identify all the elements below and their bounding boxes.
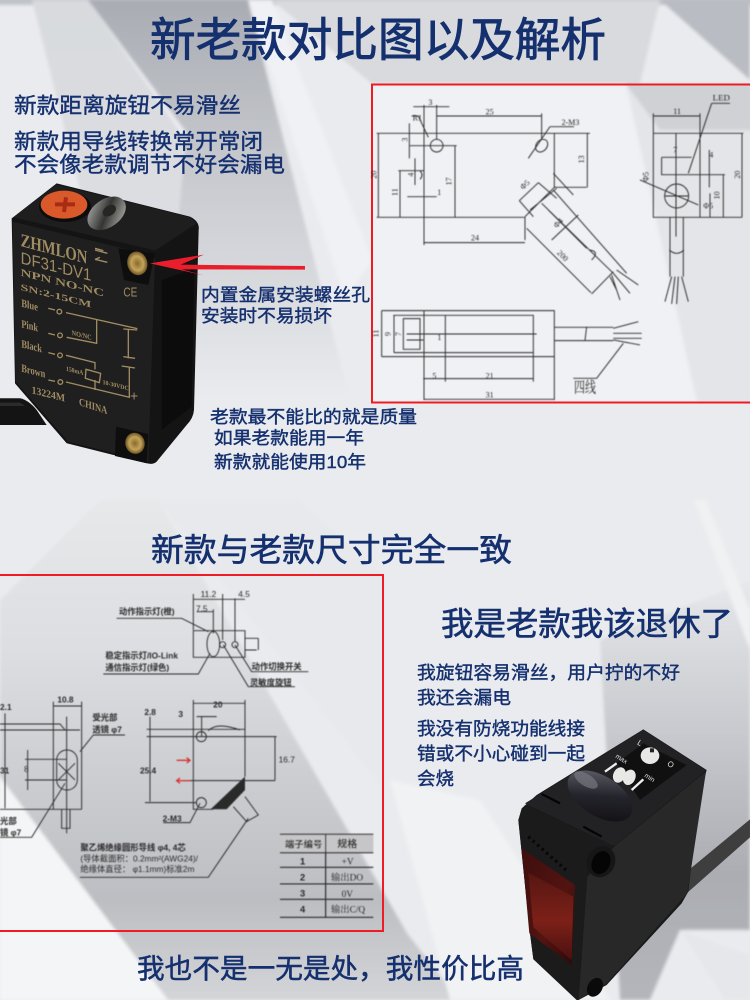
adjustment knobs: min [643,772,656,784]
printed label: 10-30VDC [103,379,129,393]
dimension labels: R1 [413,114,422,123]
terminal table: 4 [300,905,306,915]
text block: old model weaknesses: 会烧 [417,769,454,789]
brass mounting screws [123,249,150,456]
dimension labels: 稳定指示灯/IO-Link [105,651,178,661]
dimension labels: 4 [406,173,415,177]
lens [559,760,641,832]
dimension labels: 2.1 [0,702,12,712]
callout: metal mounting hole [201,285,370,326]
dimension labels: 9 [384,332,393,336]
sensor body [12,183,199,464]
printed label: Pink [21,318,38,335]
dimension labels: 16.7 [279,755,295,765]
printed label: 150mA [66,366,83,377]
old sensor product photo [518,729,750,1000]
dimension labels: Φ5 [703,201,713,210]
dimension labels: 1 [437,188,441,197]
clear lens [81,190,132,237]
dimension labels: 11.2 [201,589,217,599]
callout: quality comparison [210,407,417,472]
dimension labels: 11 [673,107,681,116]
dimension labels: Φ5 [641,172,650,182]
dimension labels: 7.5 [196,604,208,614]
cable [677,819,750,893]
dimension labels: 7 [394,332,403,336]
text block: new model features: 不会像老款调节不好会漏电 [14,153,285,177]
closing caption: 我也不是一无是处，我性价比高 [137,953,524,984]
dimension labels: 21 [486,372,494,381]
text block: new model features [14,94,285,177]
heading: old model retiring: 我是老款我该退休了 [441,606,733,642]
dimension labels: 8 [24,764,29,774]
red arrow to screw hole [150,255,305,275]
terminal table: 输出DO [331,872,363,884]
dimension labels: 24 [471,234,479,243]
dimension labels: Φ5 [518,178,532,191]
callout: metal mounting hole: 安装时不易损坏 [201,306,332,326]
dimension labels: 13 [577,155,586,163]
terminal table [280,834,373,917]
adjustment knobs [605,738,687,800]
text block: old model weaknesses: 我旋钮容易滑丝，用户拧的不好 [417,663,680,683]
callout: quality comparison: 新款就能使用10年 [214,452,366,472]
bottom view drawing [382,311,642,400]
terminal table: 0V [342,890,353,900]
adjustment knobs: max [614,753,629,766]
printed label: CE [123,286,137,300]
panel: new sensor dimension drawing [370,84,750,402]
cable [0,398,47,425]
adjustment knobs: O [666,759,676,770]
dimension labels: 动作指示灯(橙) [119,606,175,616]
terminal table: 3 [300,889,305,899]
printed label: CHINA [79,396,107,417]
side view drawing [640,103,743,304]
dimension labels: 10.8 [57,695,74,705]
dimension labels: 2.8 [144,707,156,717]
dimension labels: 11 [372,330,381,337]
mounting hole [582,841,620,1000]
sensor body [518,729,707,1000]
dimension labels: 20 [733,171,742,179]
text block: old model weaknesses: 错或不小心碰到一起 [417,744,585,764]
dimension labels: 7 [673,146,677,155]
terminal table: 1 [300,856,305,866]
terminal table: 输出C/Q [331,904,365,916]
dimension labels: 受光部 [92,713,118,723]
dimension labels: 10 [712,191,721,199]
dimension labels: 3 [400,138,409,142]
dimension labels: 灵敏度旋钮 [250,677,292,687]
front view drawing [80,700,277,877]
terminal table: +V [342,858,354,868]
callout: quality comparison: 如果老款能用一年 [214,428,364,448]
dimension labels [370,94,742,399]
callout: metal mounting hole: 内置金属安装螺丝孔 [201,285,370,305]
dimension labels: 20 [370,171,379,179]
dimension labels: 31 [0,765,10,775]
dimension labels: 25.4 [140,765,157,775]
dimension labels: 3 [178,709,183,719]
printed label: Blue [21,298,38,314]
dimension labels: 通信指示灯(绿色) [105,663,169,673]
dimension labels: 4 [709,150,713,159]
red sensor window [522,848,575,965]
vent dots [528,837,566,870]
title: 新老款对比图以及解析 [150,14,606,66]
text block: new model features: 新款距离旋钮不易滑丝 [14,94,241,118]
dimension labels: 20 [213,700,223,710]
printed label: NPN NO-NC [21,268,104,299]
dimension labels: LED [713,94,730,103]
dimension labels: 17 [445,177,454,185]
dimension labels: Φ4 [552,216,565,230]
orange distance knob [39,191,91,222]
terminal table: 端子编号 [285,839,322,850]
dimension labels: 2-M3 [562,118,579,127]
dimension labels: 动作切换开关 [252,661,302,671]
dimension labels: 四线 [574,380,596,397]
dimension labels [0,589,302,874]
printed label: SN:2-15CM [21,283,91,311]
angled cable drawing [519,173,638,300]
dimension labels: 31 [486,390,494,399]
terminal table: 规格 [337,838,357,851]
text block: new model features: 新款用导线转换常开常闭 [14,130,263,154]
printed label: DF31-DV1 [21,249,91,285]
top view drawing [103,594,308,687]
dimension labels: 4.5 [238,589,250,599]
printed label: ZHMLON [21,230,88,269]
dimension labels: 透镜 φ7 [92,724,122,734]
red direction arrows [177,758,190,783]
panel: old sensor dimension drawing [0,575,383,931]
front view drawing [377,105,590,245]
dimension labels: 200 [555,248,570,263]
side view drawing [0,702,125,837]
text block: old model weaknesses [417,663,680,789]
dimension labels: 11 [390,188,399,196]
adjustment knobs: L [636,738,645,748]
dimension labels: 3 [428,98,432,107]
dimension labels: 2-M3 [163,813,182,823]
terminal table: 2 [300,872,305,882]
dimension labels: 1 [437,333,441,342]
text block: old model weaknesses: 我还会漏电 [417,688,511,708]
printed label: + [130,388,138,404]
callout: quality comparison: 老款最不能比的就是质量 [210,407,417,427]
printed label: Black [21,338,42,356]
dimension labels: 5 [432,372,436,381]
dimension labels: 25 [486,107,494,116]
dimension labels: 聚乙烯绝缘圆形导线 φ4, 4芯 [80,843,186,853]
new sensor product photo [0,183,305,464]
printed label: Brown [21,363,46,381]
printed label: 13224M [32,384,65,405]
printed label [21,230,138,417]
printed label: NO/NC [72,328,92,342]
heading: same dimensions: 新款与老款尺寸完全一致 [151,532,512,568]
dimension labels: 绝缘体直径： φ1.1mm)标准2m [80,864,195,874]
dimension labels: (导体截面积：0.2mm²(AWG24)/ [80,853,199,863]
text block: old model weaknesses: 我没有防烧功能线接 [417,719,585,739]
